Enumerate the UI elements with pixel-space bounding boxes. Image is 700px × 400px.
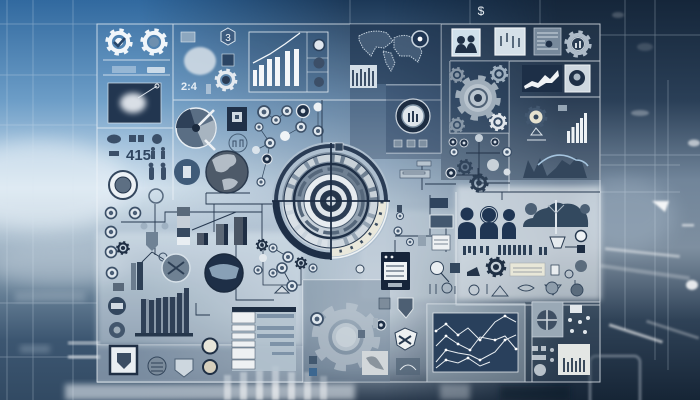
mountain chart bbox=[523, 155, 588, 178]
small bars row bbox=[463, 245, 547, 255]
mini flow cards bbox=[394, 198, 453, 250]
dollar sign glyph: $ bbox=[478, 4, 485, 18]
rising bars right bbox=[567, 113, 587, 143]
panel tonal washes bbox=[97, 24, 601, 383]
icon row with figures bbox=[107, 134, 166, 180]
world map panel bbox=[350, 24, 441, 84]
gauge and dark globe bbox=[162, 254, 243, 292]
gear with stand bbox=[526, 105, 567, 140]
node tree bottom of right column bbox=[446, 134, 512, 192]
photo badge card bbox=[565, 65, 590, 92]
dark card icon bbox=[227, 107, 247, 152]
top panel icons with cloud and gear: 2:4 bbox=[181, 81, 198, 93]
funnel and pin bbox=[550, 230, 586, 253]
ring icon panel bbox=[386, 85, 441, 153]
people card bbox=[452, 29, 480, 56]
pie dial chart bbox=[176, 108, 216, 150]
small icons and bar card bbox=[532, 344, 590, 376]
lower center node cluster bbox=[254, 240, 317, 293]
dial outer arcs bbox=[276, 146, 388, 258]
sphere tile bbox=[532, 302, 590, 337]
icon row with figures: 415 bbox=[126, 147, 151, 164]
dark image panel with burst bbox=[108, 83, 161, 123]
line chart panel bbox=[427, 304, 525, 382]
central target dial bbox=[272, 142, 390, 260]
tree cloud icon bbox=[523, 200, 590, 234]
small stacked card and stepped bars bbox=[177, 207, 247, 245]
gear cluster panel bbox=[450, 61, 509, 133]
glass panel frame bbox=[97, 24, 600, 382]
bottom left badges bbox=[110, 338, 218, 377]
data table bbox=[232, 307, 296, 371]
large bar chart bbox=[135, 288, 193, 336]
rising bar chart panel bbox=[249, 32, 328, 92]
outline icon row bbox=[430, 258, 587, 296]
faded gear block bbox=[303, 280, 390, 382]
form card bbox=[356, 252, 410, 290]
small bar chart card bbox=[350, 65, 377, 88]
shield and map tiles bbox=[358, 298, 420, 375]
candle chart card bbox=[495, 28, 525, 55]
node network top bbox=[252, 102, 323, 186]
left small icon column bbox=[106, 208, 143, 338]
shield with branches bbox=[140, 222, 168, 261]
flow boxes bbox=[400, 161, 431, 178]
document card bbox=[534, 28, 561, 55]
small data strip bbox=[112, 66, 165, 73]
bottom blurred data stripes bbox=[15, 292, 640, 400]
top panel icons with cloud and gear bbox=[181, 28, 236, 94]
gear badge top right bbox=[566, 32, 590, 56]
dark badge and globe bbox=[174, 151, 248, 193]
gauge icon bbox=[109, 171, 163, 203]
top panel icons with cloud and gear: 3 bbox=[225, 33, 231, 44]
trend chart card bbox=[522, 65, 562, 92]
people icons bbox=[458, 206, 516, 239]
gear icons top left bbox=[107, 30, 166, 54]
right side light streaks bbox=[600, 12, 700, 344]
connector lines bbox=[121, 100, 600, 315]
dial quadrant shading bbox=[282, 152, 380, 250]
